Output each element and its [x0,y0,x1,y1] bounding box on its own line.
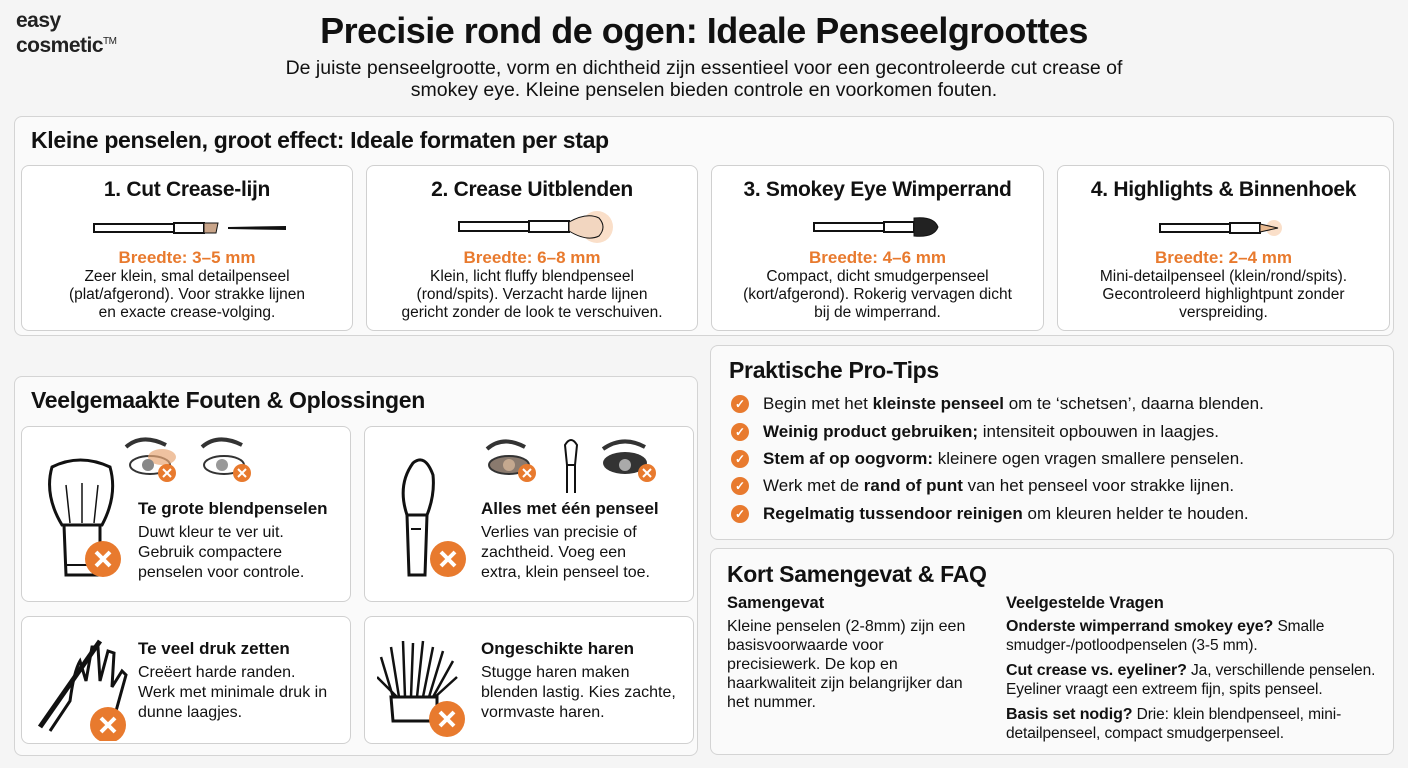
icon: big brush with x [48,458,121,577]
icon: smudger brush [813,217,938,237]
tips list [731,394,1264,523]
tips list: intensiteit opbouwen in laagjes. [983,422,1219,441]
card: smokey eye: Breedte: 4–6 mm [809,248,946,267]
card: one brush for everything: extra, klein penseel toe. [481,564,650,581]
card: one brush for everything [364,426,694,602]
tips list: Begin met het om te ‘schetsen’, daarna blenden. [763,394,1264,413]
faq text: Cut crease vs. eyeliner? Ja, verschillende penselen. Eyeliner vraagt een extreem fijn, spits penseel. [1006,662,1375,698]
icon: stiff bristles [377,640,465,737]
tips list: ✓ [735,507,745,521]
card: crease blend: Klein, licht fluffy blendpenseel [430,268,634,285]
tips list: rand of punt [864,476,963,495]
card: too much pressure: dunne laagjes. [138,704,242,721]
card: cut crease: Zeer klein, smal detailpenseel [84,268,290,285]
card: crease blend [366,165,698,331]
faq text [1006,594,1375,742]
tips list: ✓ [735,425,745,439]
card: crease blend: gericht zonder de look te verschuiven. [401,304,663,321]
card: highlights: Breedte: 2–4 mm [1155,248,1292,267]
card: one brush for everything: zachtheid. Voeg een [481,544,626,561]
card: cut crease: (plat/afgerond). Voor strakke lijnen [69,286,305,303]
card: highlights: Gecontroleerd highlightpunt zonder [1102,286,1345,303]
heading: mistakes: Veelgemaakte Fouten & Oplossingen [31,387,425,413]
panel: pro tips [710,345,1394,540]
card: too large brushes [21,426,351,602]
card: highlights [1057,165,1390,331]
card: highlights: verspreiding. [1179,304,1268,321]
icon: tall brush with x [402,458,466,577]
summary text: Samengevat [727,594,824,612]
heading: faq: Kort Samengevat & FAQ [727,561,987,587]
card: wrong hairs: Stugge haren maken [481,664,630,681]
panel: mistakes [14,376,698,756]
card: one brush for everything: Verlies van precisie of [481,524,637,541]
faq text: Onderste wimperrand smokey eye? Smalle smudger-/potloodpenselen (3-5 mm). [1006,618,1324,654]
icon: eyes [124,437,251,482]
subtitle: De juiste penseelgrootte, vorm en dichtheid zijn essentieel voor een gecontroleerde cut crease of smokey eye. Kleine penselen bieden controle en voorkomen fouten. [286,57,1122,101]
card: wrong hairs [364,616,694,744]
tips list: Weinig product gebruiken; [763,422,978,441]
tips list: ✓ [735,479,745,493]
logo: easy [16,9,61,32]
card: too much pressure: Te veel druk zetten [138,639,290,658]
icon: fluffy blend brush [458,211,613,243]
icon: mini detail brush [1159,220,1282,236]
logo [16,9,116,57]
icon: eyes and small brush [486,439,656,493]
card: too much pressure: Werk met minimale druk in [138,684,327,701]
faq text: Basis set nodig? Drie: klein blendpenseel, mini-detailpenseel, compact smudgerpenseel. [1006,706,1341,742]
tips list: Stem af op oogvorm: [763,449,933,468]
tips list: Werk met de van het penseel voor strakke lijnen. [763,476,1234,495]
card: smokey eye: bij de wimperrand. [814,304,941,321]
heading: pro tips: Praktische Pro-Tips [729,357,939,383]
card: crease blend: (rond/spits). Verzacht harde lijnen [417,286,647,303]
card: too much pressure [21,616,351,744]
card: smokey eye [711,165,1044,331]
card: cut crease [21,165,353,331]
icon: flat detail brush [93,222,286,234]
card: too large brushes: Te grote blendpenselen [138,499,328,518]
card: cut crease: 1. Cut Crease-lijn [104,178,270,201]
tips list: kleinste penseel [873,394,1004,413]
tips list: kleinere ogen vragen smallere penselen. [938,449,1244,468]
icon: hand with brush [38,640,128,741]
card: too large brushes: Duwt kleur te ver uit. [138,524,284,541]
card: too large brushes: Gebruik compactere [138,544,282,561]
card: too large brushes: penselen voor controle. [138,564,304,581]
card: cut crease: en exacte crease-volging. [99,304,275,321]
tips list: Regelmatig tussendoor reinigen [763,504,1023,523]
panel: ideal sizes [14,116,1394,336]
card: cut crease: Breedte: 3–5 mm [118,248,256,267]
faq text: Veelgestelde Vragen [1006,594,1164,612]
logo: cosmeticTM [16,34,116,57]
card: wrong hairs: blenden lastig. Kies zachte, [481,684,676,701]
panel: summary & faq [710,548,1394,755]
card: highlights: Mini-detailpenseel (klein/rond/spits). [1100,268,1347,285]
card: crease blend: 2. Crease Uitblenden [431,178,633,201]
tips list: ✓ [735,397,745,411]
tips list: om kleuren helder te houden. [1027,504,1249,523]
card: wrong hairs: vormvaste haren. [481,704,605,721]
tips list: ✓ [735,452,745,466]
card: crease blend: Breedte: 6–8 mm [463,248,600,267]
card: smokey eye: 3. Smokey Eye Wimperrand [743,178,1012,201]
heading: ideal sizes: Kleine penselen, groot effect: Ideale formaten per stap [31,127,609,153]
card: smokey eye: Compact, dicht smudgerpenseel [766,268,989,285]
card: one brush for everything: Alles met één penseel [481,499,659,518]
card: too much pressure: Creëert harde randen. [138,664,295,681]
card: smokey eye: (kort/afgerond). Rokerig vervagen dicht [743,286,1012,303]
title: Precisie rond de ogen: Ideale Penseelgroottes [320,10,1088,51]
card: highlights: 4. Highlights & Binnenhoek [1091,178,1356,201]
summary text: Kleine penselen (2-8mm) zijn een basisvoorwaarde voor precisiewerk. De kop en haarkwaliteit zijn belangrijker dan het nummer. [727,618,965,711]
card: wrong hairs: Ongeschikte haren [481,639,634,658]
